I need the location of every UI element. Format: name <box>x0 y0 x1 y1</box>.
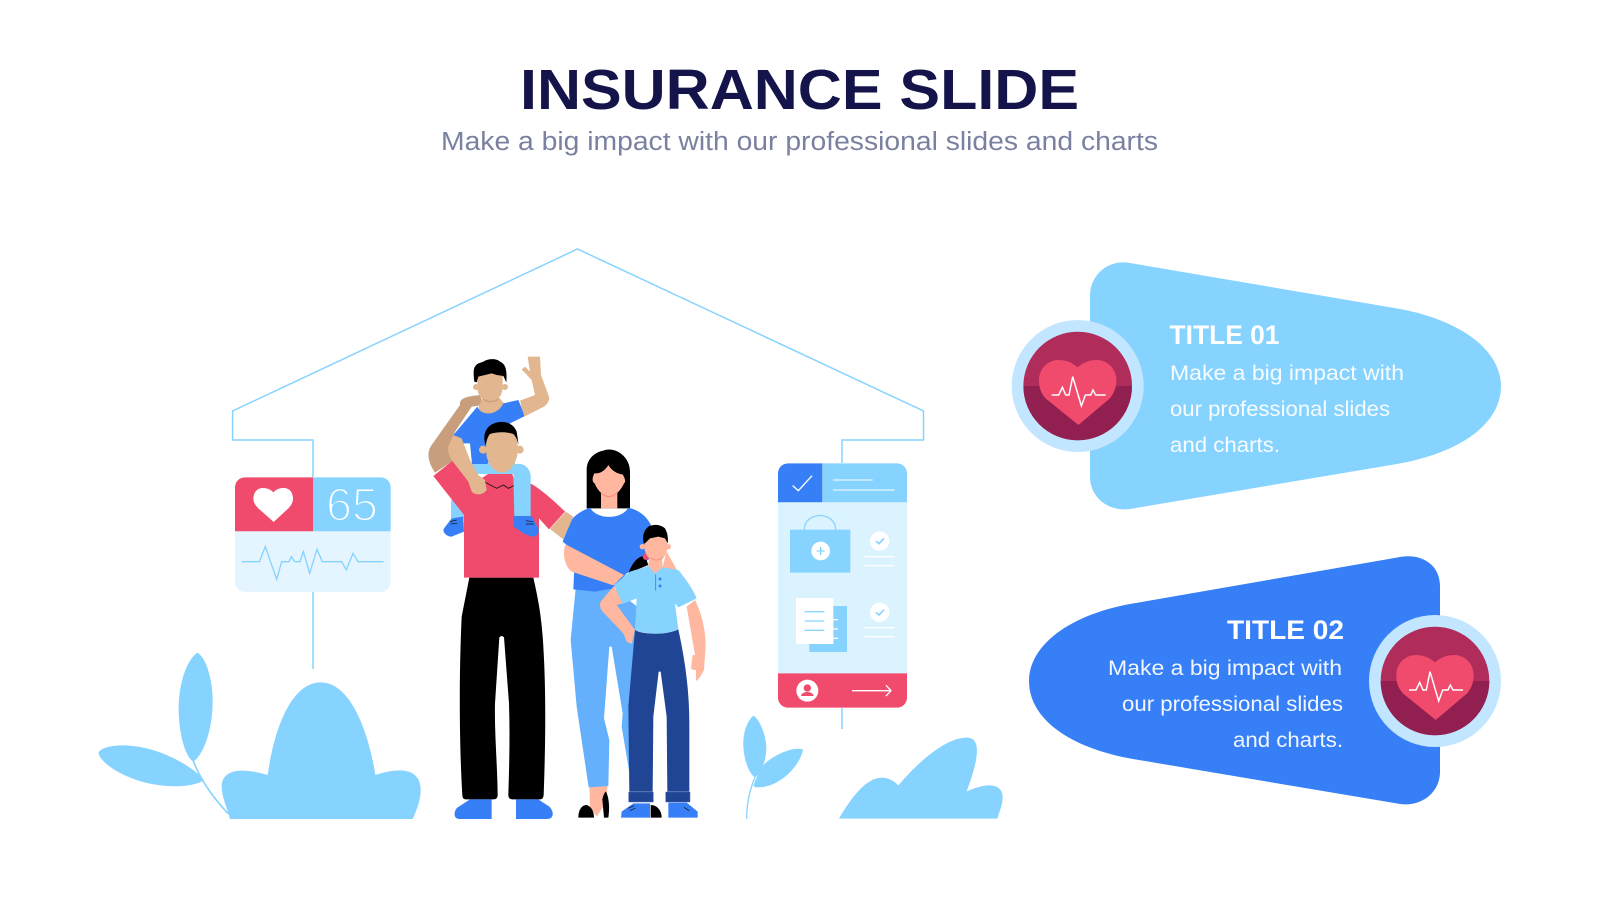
house outline <box>233 249 924 729</box>
family illustration <box>428 357 706 819</box>
body text: Make a big impact with <box>1108 656 1342 680</box>
subtitle: Make a big impact with our professional slides and charts <box>441 128 1158 156</box>
checklist item two <box>865 603 895 637</box>
boy arm and legs <box>443 435 539 537</box>
girl <box>600 525 706 818</box>
icon: documents <box>796 598 847 652</box>
body text: Make a big impact with <box>1170 361 1404 385</box>
body text <box>1170 361 1404 457</box>
man <box>428 395 573 819</box>
boy on shoulders <box>453 357 549 474</box>
icon: white heart <box>253 488 293 522</box>
body text: our professional slides <box>1170 397 1390 421</box>
icon: heart badge <box>1012 320 1144 452</box>
body text: and charts. <box>1170 433 1280 457</box>
right plant <box>743 716 1003 819</box>
heading: TITLE 02 <box>1227 615 1344 645</box>
body text <box>1108 656 1343 752</box>
insurance app card <box>778 463 907 708</box>
body text: our professional slides <box>1122 692 1343 716</box>
heart rate card <box>235 477 391 592</box>
icon: heart badge <box>1369 615 1501 747</box>
heart rate value: 65 <box>326 478 378 530</box>
heading: TITLE 01 <box>1170 320 1280 350</box>
left plant <box>98 653 421 819</box>
arrow <box>852 685 891 696</box>
title: INSURANCE SLIDE <box>520 58 1079 122</box>
icon: user <box>796 680 818 702</box>
man head <box>479 422 524 473</box>
pulse line <box>242 547 384 579</box>
check mark <box>793 476 812 491</box>
checklist item one <box>865 531 895 566</box>
body text: and charts. <box>1233 728 1343 752</box>
panel: title 01 <box>1012 262 1501 509</box>
icon: medical bag <box>790 515 850 573</box>
panel: title 02 <box>1029 556 1501 804</box>
woman <box>563 449 677 818</box>
